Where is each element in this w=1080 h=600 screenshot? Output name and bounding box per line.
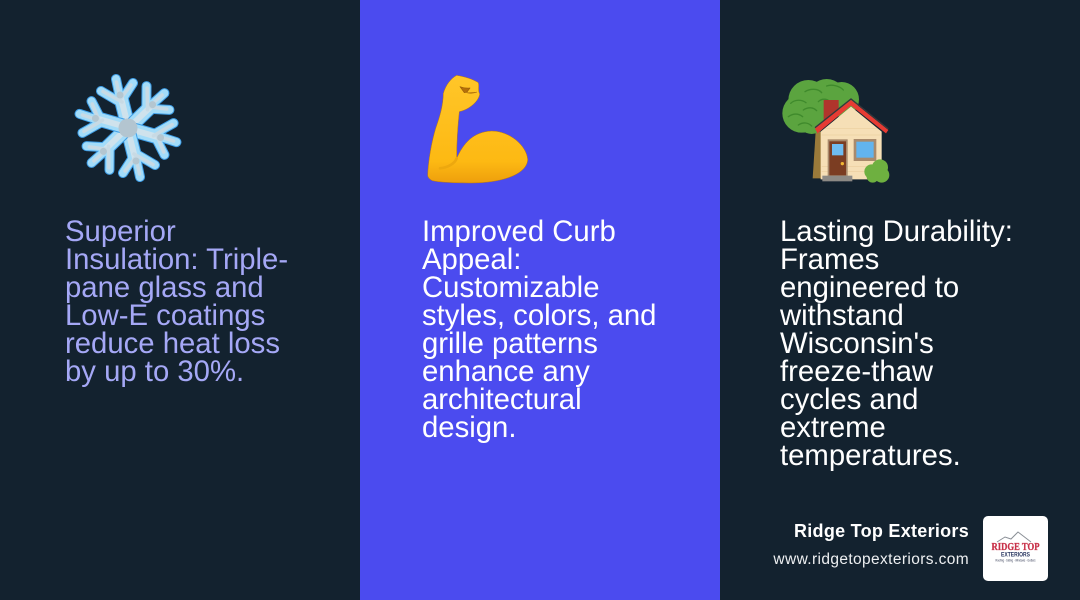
text: insulation: pane glass and bbox=[65, 271, 264, 304]
text: curb appeal bbox=[422, 215, 656, 444]
text: durability: extreme bbox=[780, 411, 886, 444]
text: curb appeal: Customizable bbox=[422, 271, 599, 304]
text: durability: engineered to bbox=[780, 271, 959, 304]
logo: EXTERIORS bbox=[1001, 552, 1030, 558]
text: insulation: Low-E coatings bbox=[65, 299, 265, 332]
text: insulation: Superior bbox=[65, 215, 176, 248]
text: durability: Lasting Durability: bbox=[780, 215, 1013, 248]
text: curb appeal: styles, colors, and bbox=[422, 299, 656, 332]
logo: Roofing · Siding · Windows · Gutters bbox=[996, 558, 1036, 562]
text: durability: withstand bbox=[780, 299, 904, 332]
text: curb appeal: design. bbox=[422, 411, 516, 444]
icon: house with tree bbox=[782, 79, 890, 183]
text: durability: temperatures. bbox=[780, 439, 961, 472]
text: curb appeal: Improved Curb bbox=[422, 215, 616, 248]
logo bbox=[983, 516, 1048, 581]
icon: flexed biceps bbox=[427, 75, 528, 184]
website url: www.ridgetopexteriors.com bbox=[773, 551, 969, 568]
text: durability: Wisconsin's bbox=[780, 327, 934, 360]
panel: curb appeal bbox=[360, 0, 720, 600]
text: curb appeal: architectural bbox=[422, 383, 582, 416]
text: durability: cycles and bbox=[780, 383, 918, 416]
text: insulation: Insulation: Triple- bbox=[65, 243, 288, 276]
text: insulation: by up to 30%. bbox=[65, 355, 244, 388]
text: curb appeal: grille patterns bbox=[422, 327, 598, 360]
icon: snowflake bbox=[74, 74, 182, 182]
text: durability: Frames bbox=[780, 243, 879, 276]
text: insulation bbox=[65, 215, 288, 388]
text: durability: freeze-thaw bbox=[780, 355, 933, 388]
text: curb appeal: Appeal: bbox=[422, 243, 521, 276]
brand name: Ridge Top Exteriors bbox=[794, 521, 969, 541]
text: curb appeal: enhance any bbox=[422, 355, 590, 388]
panel: insulation bbox=[0, 0, 360, 600]
text: insulation: reduce heat loss bbox=[65, 327, 280, 360]
logo: RIDGE TOP bbox=[992, 541, 1040, 553]
panel: durability bbox=[720, 0, 1080, 600]
text: durability bbox=[780, 215, 1013, 472]
